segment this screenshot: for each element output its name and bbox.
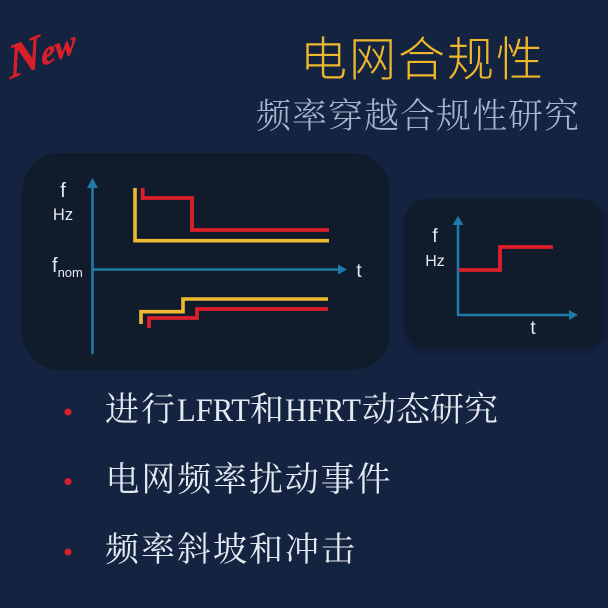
bullet item 3: 频率斜坡和冲击 [105, 531, 355, 569]
line: upper red limit [143, 188, 329, 230]
panel: frequency step chart [404, 199, 604, 349]
axis: frequency y axis [452, 216, 464, 315]
panel shadow [404, 201, 607, 353]
label: t: t [356, 261, 362, 282]
line: lower yellow limit [141, 299, 328, 324]
bullet list [64, 391, 498, 569]
subtitle: 频率穿越合规性研究 [256, 97, 579, 136]
title: 电网合规性 [300, 33, 543, 86]
bullet item 1 [64, 391, 498, 429]
bullet item 1: 进行 [105, 391, 175, 429]
label: Hz: Hz [425, 253, 445, 270]
label: f: f [60, 180, 66, 202]
axis: time x axis [93, 264, 347, 274]
line: lower red limit [149, 309, 328, 328]
label: f nominal: nom [58, 265, 83, 280]
label: Hz: Hz [53, 206, 73, 224]
line: red frequency step [459, 247, 553, 270]
line: upper yellow limit [135, 188, 329, 241]
axis: frequency y axis [87, 178, 98, 353]
bullet item 1: LFRT [177, 393, 250, 429]
logo: New: New [5, 10, 78, 91]
bullet item 2: 电网频率扰动事件 [106, 461, 390, 499]
label: f nominal: f [52, 255, 58, 277]
label: t: t [530, 318, 536, 339]
label: f: f [432, 226, 438, 247]
panel: frequency ride-through chart [22, 153, 390, 370]
bullet item 1: 和 [250, 392, 284, 429]
bullet item 1: 动态研究 [362, 391, 498, 429]
bullet item 1: HFRT [285, 393, 361, 429]
axis: time x axis [457, 310, 578, 320]
